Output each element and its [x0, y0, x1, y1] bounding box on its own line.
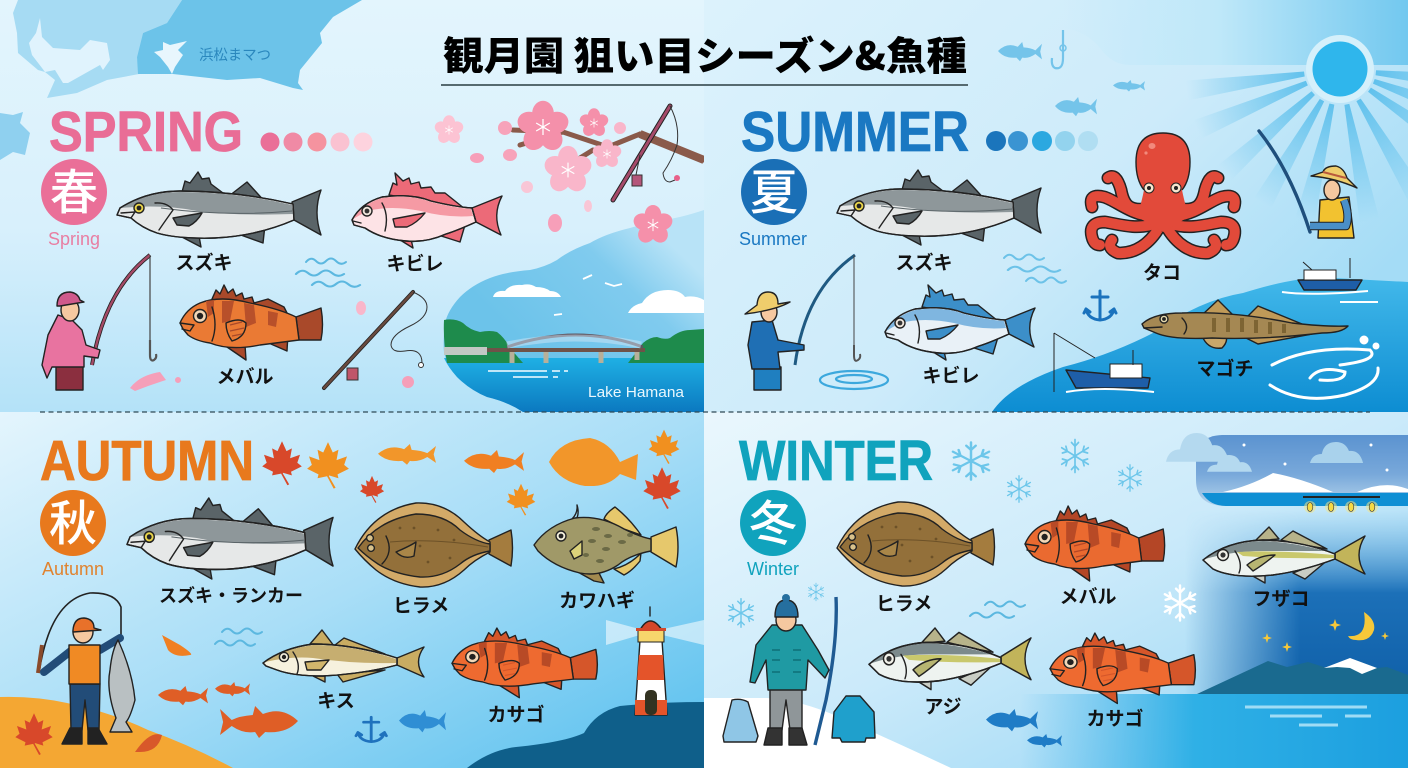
fish: kasago — [452, 628, 597, 698]
icon: ripple — [820, 371, 888, 389]
label: mebaru: メバル — [216, 366, 274, 388]
cherry branch and blossoms — [433, 101, 704, 246]
fishing rod with lure — [324, 292, 427, 388]
label: tako: タコ — [1143, 262, 1181, 284]
orange fish silhouettes — [158, 438, 638, 738]
panel: spring — [0, 0, 704, 412]
panel: winter — [704, 412, 1408, 768]
sand shore — [0, 697, 233, 768]
fish: kasago — [1050, 633, 1195, 704]
label: kibire: キビレ — [386, 253, 444, 275]
season badge: winter: Winter — [747, 559, 799, 579]
angler: summer left — [745, 255, 860, 390]
fish: suzuki and lunker — [127, 498, 333, 579]
icon: anchor — [356, 717, 386, 742]
label: mebaru: メバル — [1059, 586, 1117, 608]
label: hirame: ヒラメ — [876, 594, 932, 615]
season badge: spring — [41, 153, 107, 249]
fish: kisu — [263, 630, 424, 682]
season badge: winter — [740, 484, 806, 579]
season badge: spring: Spring — [48, 229, 100, 249]
fish: mebaru — [1025, 506, 1165, 581]
fishing rod on branch — [613, 106, 680, 200]
icon: boat top — [1282, 258, 1378, 302]
fish: hirame — [355, 503, 512, 587]
fish: kawahagi — [534, 505, 678, 583]
season badge: winter: 冬 — [749, 484, 797, 554]
autumn background — [0, 412, 704, 768]
season badge: autumn — [40, 484, 106, 579]
label: kasago: カサゴ — [487, 703, 545, 726]
season badge: summer — [739, 153, 807, 249]
map of Hamamatsu coast — [0, 0, 362, 160]
progress dots — [260, 132, 372, 152]
season badge: summer: Summer — [739, 229, 807, 249]
angler: spring — [42, 255, 156, 390]
fish: octopus — [1091, 133, 1235, 253]
label: kisu: キス — [317, 691, 355, 712]
lighthouse — [606, 607, 704, 715]
sun with rays — [1185, 35, 1408, 223]
angler: winter — [750, 594, 836, 745]
label: hirame: ヒラメ — [393, 596, 449, 617]
heading: SUMMER: SUMMER — [741, 100, 969, 164]
label: suzuki: スズキ — [895, 251, 953, 274]
snow ground — [704, 698, 951, 768]
season badge: autumn: 秋 — [49, 484, 97, 554]
sea — [992, 278, 1408, 412]
title: 観月園 狙い目シーズン&魚種 — [443, 26, 967, 82]
icon: anchor — [1084, 291, 1116, 320]
season badge: spring: 春 — [50, 153, 98, 223]
label: magochi: マゴチ — [1196, 357, 1254, 380]
blue fish silhouettes — [986, 709, 1062, 747]
icon: petals on ground — [130, 372, 181, 391]
panel: summer — [704, 0, 1408, 412]
label: aji: アジ — [924, 697, 962, 718]
icon: fishing boat — [1054, 333, 1154, 392]
icons: small fish and hook — [998, 30, 1145, 116]
angler: summer right — [1259, 131, 1357, 238]
season badge: autumn: Autumn — [42, 559, 104, 579]
angler: autumn — [38, 593, 135, 744]
heading: SPRING: SPRING — [49, 100, 243, 164]
divider — [40, 411, 1370, 413]
panel: autumn — [0, 412, 704, 768]
label: kawahagi: カワハギ — [559, 590, 635, 612]
fish: kibire blue — [885, 285, 1035, 360]
fish: mebaru — [180, 285, 322, 360]
icon: waves — [970, 602, 1025, 618]
sea — [1020, 694, 1408, 768]
label: kasago: カサゴ — [1086, 707, 1144, 730]
snowflakes — [729, 440, 1195, 627]
label: kibire: キビレ — [922, 365, 980, 387]
title rule — [441, 84, 968, 86]
lake scene: Lake Hamana — [444, 210, 704, 412]
label: suzuki lunker: スズキ・ランカー — [159, 585, 303, 606]
dark headland — [467, 702, 704, 768]
season badge: summer: 夏 — [750, 153, 798, 223]
summer background — [704, 0, 1408, 412]
icon: spare jacket light — [723, 699, 758, 742]
moon and stars — [1262, 612, 1389, 652]
icon: spare jacket teal — [832, 696, 875, 742]
fish: aji right — [1203, 527, 1365, 583]
icon: waves — [1004, 254, 1066, 283]
winter background — [704, 412, 1408, 768]
fish: aji — [869, 628, 1031, 690]
heading: AUTUMN: AUTUMN — [40, 429, 254, 493]
fish: kibire pink — [352, 173, 502, 248]
fish: hirame — [837, 502, 994, 586]
icon: waves — [215, 628, 262, 646]
lake caption: Lake Hamana — [588, 385, 685, 401]
icon: waves — [296, 258, 360, 287]
fish: magochi — [1142, 300, 1348, 348]
spring background — [0, 0, 704, 412]
fish: suzuki — [837, 170, 1041, 245]
label: fuzako: フザコ — [1252, 588, 1310, 610]
icon: swirl — [1270, 337, 1378, 398]
map place name: 浜松まマつ — [199, 47, 271, 64]
night sky band — [1166, 433, 1408, 513]
fish: suzuki — [117, 172, 321, 247]
night mountains — [1197, 658, 1408, 725]
heading: WINTER: WINTER — [739, 429, 933, 493]
autumn leaves — [15, 430, 681, 755]
progress dots — [986, 131, 1098, 151]
label: suzuki: スズキ — [175, 251, 233, 274]
